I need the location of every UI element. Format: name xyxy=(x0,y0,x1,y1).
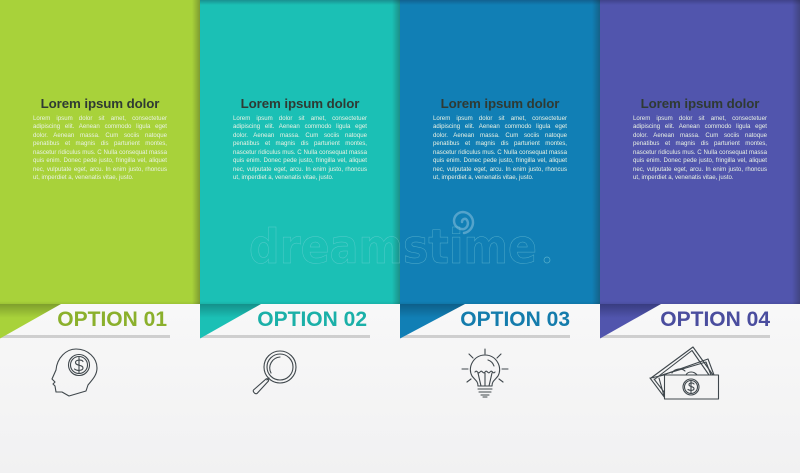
text block: blue column: Lorem ipsum dolor sit amet, consectetuer xyxy=(433,114,567,122)
text block: indigo column: quis enim. Donec pede justo, fringilla vel, aliquet xyxy=(633,157,767,164)
divider rule: option 01 xyxy=(0,335,170,338)
text block: blue column: penatibus et magnis dis parturient montes, xyxy=(433,140,567,147)
panel: blue column xyxy=(400,0,600,304)
panel: teal column xyxy=(200,0,400,304)
text block: teal column: quis enim. Donec pede justo, fringilla vel, aliquet xyxy=(233,157,367,164)
fold triangle: teal xyxy=(200,304,261,338)
text block: indigo column: penatibus et magnis dis parturient montes, xyxy=(633,140,767,147)
watermark registered mark xyxy=(544,257,550,263)
text block: teal column: Lorem ipsum dolor sit amet, consectetuer xyxy=(233,114,367,122)
fold triangle: indigo xyxy=(600,304,661,338)
icon: head with dollar xyxy=(52,348,98,396)
text block: indigo column: ut, imperdiet a, venenatis vitae, justo. xyxy=(633,174,734,181)
text block: blue column: quis enim. Donec pede justo, fringilla vel, aliquet xyxy=(433,157,567,164)
divider rule: option 02 xyxy=(200,335,370,338)
fold triangle: blue xyxy=(400,304,465,338)
text block: teal column: ut, imperdiet a, venenatis vitae, justo. xyxy=(233,174,334,181)
text block: green column: nascetur ridiculus mus. C Nulla consequat massa xyxy=(33,149,167,156)
heading: indigo column: Lorem ipsum dolor xyxy=(641,96,759,111)
text block: green column xyxy=(33,114,167,181)
panel: indigo column xyxy=(600,0,800,304)
text block: green column: dolor. Aenean massa. Cum sociis natoque xyxy=(33,132,167,139)
text block: green column: quis enim. Donec pede justo, fringilla vel, aliquet xyxy=(33,157,167,164)
icon: banknotes xyxy=(649,346,720,400)
text block: indigo column: nec, vulputate eget, arcu. In enim justo, rhoncus xyxy=(633,166,767,173)
text block: green column: ut, imperdiet a, venenatis vitae, justo. xyxy=(33,174,134,181)
text block: blue column: adipiscing elit. Aenean commodo ligula eget xyxy=(433,123,567,130)
text block: green column: nec, vulputate eget, arcu. In enim justo, rhoncus xyxy=(33,166,167,173)
option label 03: OPTION 03 xyxy=(460,308,570,331)
text block: indigo column xyxy=(633,114,767,181)
text block: teal column: nec, vulputate eget, arcu. In enim justo, rhoncus xyxy=(233,166,367,173)
icon: magnifying glass xyxy=(252,350,297,394)
watermark swirl xyxy=(454,212,473,233)
text block: green column: Lorem ipsum dolor sit amet, consectetuer xyxy=(33,114,167,122)
text block: green column: adipiscing elit. Aenean commodo ligula eget xyxy=(33,123,167,130)
text block: teal column: adipiscing elit. Aenean commodo ligula eget xyxy=(233,123,367,130)
option label 02: OPTION 02 xyxy=(257,308,367,331)
text block: blue column xyxy=(433,114,567,181)
divider rule: option 03 xyxy=(400,335,570,338)
heading: teal column: Lorem ipsum dolor xyxy=(241,96,359,111)
divider rule: option 04 xyxy=(600,335,770,338)
text block: blue column: nascetur ridiculus mus. C Nulla consequat massa xyxy=(433,149,567,156)
fold triangle: green xyxy=(0,304,61,338)
text block: teal column xyxy=(233,114,367,181)
panel: green column xyxy=(0,0,200,304)
text block: green column: penatibus et magnis dis parturient montes, xyxy=(33,140,167,147)
watermark word: dreamstime xyxy=(249,220,537,275)
text block: indigo column: Lorem ipsum dolor sit amet, consectetuer xyxy=(633,114,767,122)
text block: blue column: nec, vulputate eget, arcu. In enim justo, rhoncus xyxy=(433,166,567,173)
text block: teal column: penatibus et magnis dis parturient montes, xyxy=(233,140,367,147)
watermark: dreamstime xyxy=(249,210,550,275)
text block: indigo column: adipiscing elit. Aenean commodo ligula eget xyxy=(633,123,767,130)
text block: indigo column: nascetur ridiculus mus. C Nulla consequat massa xyxy=(633,149,767,156)
text block: blue column: dolor. Aenean massa. Cum sociis natoque xyxy=(433,132,567,139)
heading: blue column: Lorem ipsum dolor xyxy=(441,96,559,111)
text block: indigo column: dolor. Aenean massa. Cum sociis natoque xyxy=(633,132,767,139)
icon: light bulb xyxy=(462,348,508,398)
text block: teal column: dolor. Aenean massa. Cum sociis natoque xyxy=(233,132,367,139)
option label 04: OPTION 04 xyxy=(660,308,770,331)
text block: blue column: ut, imperdiet a, venenatis vitae, justo. xyxy=(433,174,534,181)
text block: teal column: nascetur ridiculus mus. C Nulla consequat massa xyxy=(233,149,367,156)
option label 01: OPTION 01 xyxy=(57,308,167,331)
heading: green column: Lorem ipsum dolor xyxy=(41,96,159,111)
